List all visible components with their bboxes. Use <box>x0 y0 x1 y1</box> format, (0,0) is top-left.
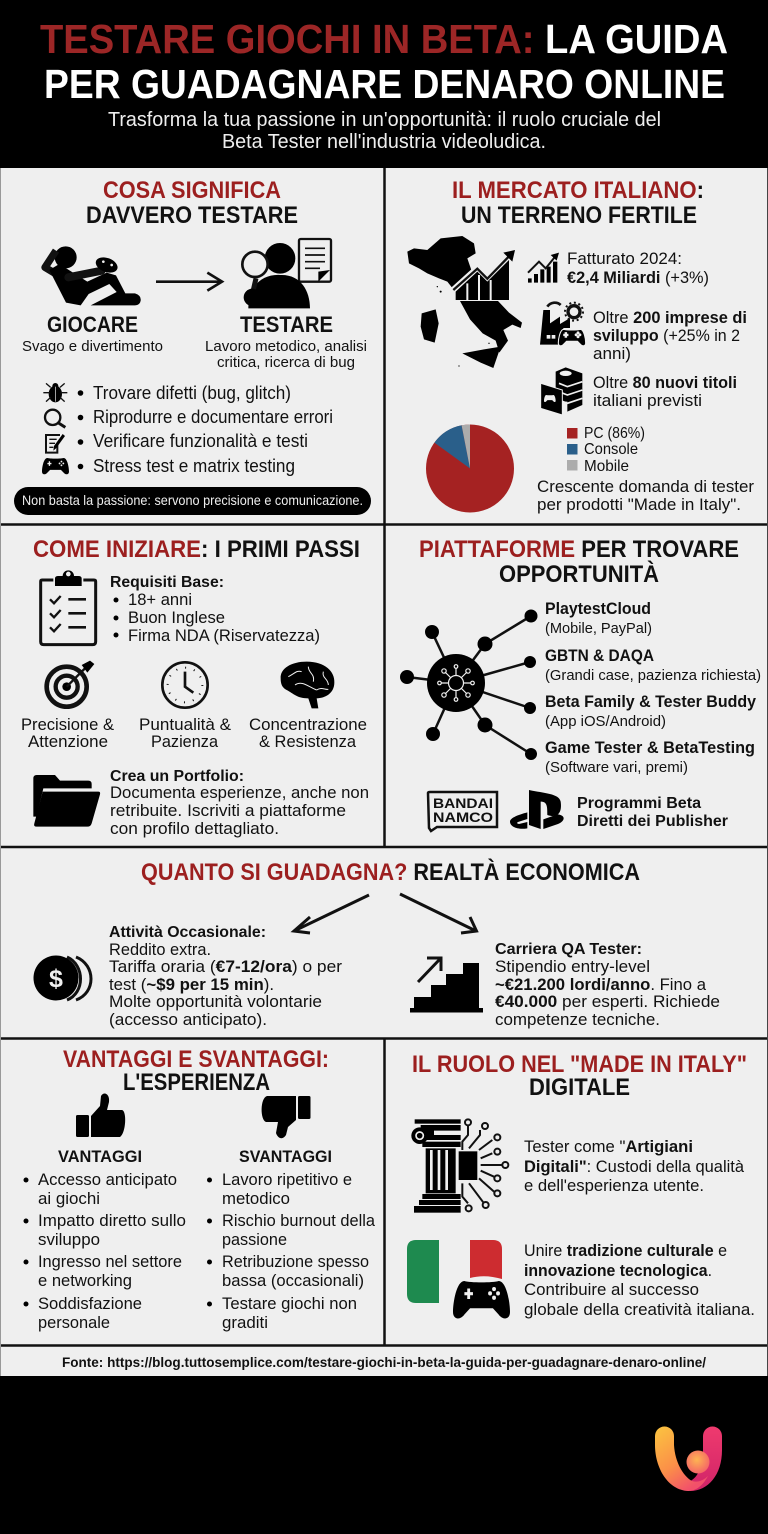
text: attivita occasionale: Tariffa oraria (€7-12/ora) o per <box>109 957 342 976</box>
list: tasks: Riprodurre e documentare errori <box>93 407 333 427</box>
stat: fatturato: Fatturato 2024: <box>567 249 682 268</box>
label: testare <box>205 312 367 371</box>
list: tasks: Trovare difetti (bug, glitch) <box>93 383 291 403</box>
list: tasks: Stress test e matrix testing <box>93 456 295 476</box>
stat: imprese: sviluppo (+25% in 2 <box>593 326 740 345</box>
heading: IL MERCATO ITALIANO: <box>452 177 704 204</box>
text: portfolio: Crea un Portfolio: <box>110 768 244 785</box>
panels background <box>0 168 768 1376</box>
header <box>40 16 728 153</box>
list: vantaggi: Accesso anticipato <box>38 1170 177 1189</box>
subtitle: Beta Tester nell'industria videoludica. <box>222 131 546 153</box>
icon: column with circuit <box>411 1119 508 1213</box>
panel: vantaggi e svantaggi <box>24 1046 376 1332</box>
panel: made in italy <box>407 1051 755 1319</box>
callout: Non basta la passione: servono precisione e comunicazione. <box>22 492 363 508</box>
icon: bug <box>43 383 67 402</box>
title <box>40 16 728 107</box>
heading: VANTAGGI E SVANTAGGI: <box>63 1046 329 1073</box>
arrow: right <box>400 894 476 933</box>
text: carriera qa: Carriera QA Tester: <box>495 941 642 958</box>
heading <box>452 177 704 229</box>
list: tasks: Verificare funzionalità e testi <box>93 431 308 451</box>
legend: PC (86%) <box>584 425 645 442</box>
icon: thumb up <box>76 1094 125 1137</box>
text: domanda: per prodotti "Made in Italy". <box>537 495 741 514</box>
logo: bandai namco: NAMCO <box>433 809 493 825</box>
text: carriera qa: competenze tecniche. <box>495 1010 660 1029</box>
text: requisiti: Buon Inglese <box>128 608 225 627</box>
title: TESTARE GIOCHI IN BETA: LA GUIDA <box>40 16 728 62</box>
icon: target <box>47 661 94 707</box>
label: testare: Lavoro metodico, analisi <box>205 338 367 355</box>
labels: skills <box>21 715 367 751</box>
list: svantaggi: metodico <box>222 1189 290 1208</box>
callout <box>14 487 371 515</box>
list: svantaggi <box>207 1147 376 1332</box>
pie chart <box>426 424 514 512</box>
text: carriera qa: €40.000 per esperti. Richiede <box>495 992 720 1011</box>
list: vantaggi: sviluppo <box>38 1230 100 1249</box>
text: carriera qa <box>495 941 720 1029</box>
text: artigiani digitali: e dell'esperienza utente. <box>524 1176 704 1195</box>
text: programmi beta: Diretti dei Publisher <box>577 813 728 830</box>
icon: games stack <box>541 367 582 415</box>
text: requisiti: 18+ anni <box>128 590 192 609</box>
list: platforms: (App iOS/Android) <box>545 713 666 730</box>
list: platforms: (Mobile, PayPal) <box>545 620 652 637</box>
text: portfolio: con profilo dettagliato. <box>110 819 279 838</box>
label: giocare <box>22 312 163 355</box>
logo: playstation <box>510 790 564 829</box>
text: carriera qa: ~€21.200 lordi/anno. Fino a <box>495 975 707 994</box>
list: svantaggi: Retribuzione spesso <box>222 1252 369 1271</box>
list: platforms: (Grandi case, pazienza richiesta) <box>545 667 761 684</box>
list: svantaggi: Rischio burnout della <box>222 1211 376 1230</box>
text: portfolio: retribuite. Iscriviti a piattaforme <box>110 801 346 820</box>
stat: fatturato <box>567 249 709 287</box>
text: carriera qa: Stipendio entry-level <box>495 957 650 976</box>
list: svantaggi: SVANTAGGI <box>239 1147 332 1166</box>
text: artigiani digitali: Tester come "Artigiani <box>524 1137 693 1156</box>
text: tradizione: Unire tradizione culturale e <box>524 1241 727 1260</box>
text: tradizione: Contribuire al successo <box>524 1280 699 1299</box>
logo: brand u <box>655 1426 722 1491</box>
text: programmi beta: Programmi Beta <box>577 795 701 812</box>
panel: cosa significa <box>14 177 371 515</box>
labels: skills: Pazienza <box>151 732 219 751</box>
list: tasks <box>78 383 333 476</box>
label: giocare: Svago e divertimento <box>22 338 163 355</box>
icon: checklist note <box>46 434 65 453</box>
text: requisiti <box>110 574 320 645</box>
heading: COME INIZIARE: I PRIMI PASSI <box>33 536 360 563</box>
icon: growth chart <box>528 253 559 283</box>
text: artigiani digitali <box>524 1137 745 1195</box>
label: giocare: GIOCARE <box>47 312 138 337</box>
stat: imprese: anni) <box>593 344 631 363</box>
text: requisiti: Requisiti Base: <box>110 574 224 591</box>
labels: skills: Precisione & <box>21 715 115 734</box>
stat: titoli: Oltre 80 nuovi titoli <box>593 373 737 392</box>
icon: network hub <box>400 610 538 760</box>
panel: come iniziare <box>21 536 369 838</box>
text: attivita occasionale: (accesso anticipato). <box>109 1010 267 1029</box>
list: svantaggi: Lavoro ripetitivo e <box>222 1170 352 1189</box>
heading: OPPORTUNITÀ <box>499 560 659 588</box>
list: vantaggi: Soddisfazione <box>38 1294 142 1313</box>
list: platforms: PlaytestCloud <box>545 599 651 618</box>
legend: Mobile <box>584 458 629 475</box>
legend: Console <box>584 441 638 458</box>
text: attivita occasionale: test (~$9 per 15 min). <box>109 975 274 994</box>
icon: clipboard <box>41 570 96 645</box>
heading <box>63 1046 329 1096</box>
list: platforms: Game Tester & BetaTesting <box>545 738 755 757</box>
text: attivita occasionale: Reddito extra. <box>109 940 211 959</box>
icon: coins <box>34 956 91 1000</box>
stat: imprese <box>593 308 747 363</box>
heading: DAVVERO TESTARE <box>86 202 298 229</box>
text: artigiani digitali: Digitali": Custodi della qualità <box>524 1157 745 1176</box>
icon: clock <box>162 662 208 708</box>
panel: quanto si guadagna <box>34 858 720 1029</box>
legend <box>567 425 645 475</box>
list: platforms: Beta Family & Tester Buddy <box>545 692 757 711</box>
text: tradizione: innovazione tecnologica. <box>524 1261 712 1280</box>
text: programmi beta <box>577 795 728 830</box>
heading: COSA SIGNIFICA <box>103 177 281 204</box>
heading <box>86 177 298 229</box>
text: attivita occasionale: Molte opportunità volontarie <box>109 992 322 1011</box>
text: requisiti: Firma NDA (Riservatezza) <box>128 626 320 645</box>
text: tradizione: globale della creatività italiana. <box>524 1300 755 1319</box>
text: domanda <box>537 477 754 514</box>
heading: DIGITALE <box>529 1074 630 1101</box>
label: testare: critica, ricerca di bug <box>217 354 355 371</box>
arrow: giocare to testare <box>156 273 222 291</box>
icon: thumb down <box>262 1096 310 1138</box>
list: vantaggi: e networking <box>38 1271 132 1290</box>
icon: player relaxing <box>45 246 141 305</box>
icon: italy map with chart <box>407 236 522 368</box>
subtitle <box>108 109 661 153</box>
labels: skills: Concentrazione <box>249 715 367 734</box>
text: attivita occasionale: Attività Occasionale: <box>109 924 266 941</box>
text: attivita occasionale <box>109 924 342 1029</box>
panel: piattaforme <box>400 536 761 831</box>
list: platforms: GBTN & DAQA <box>545 646 654 665</box>
list: vantaggi: Ingresso nel settore <box>38 1252 182 1271</box>
heading: L'ESPERIENZA <box>123 1069 270 1096</box>
arrow: left <box>294 895 369 933</box>
icon: magnifier <box>45 410 65 427</box>
icon: career stairs <box>410 958 483 1012</box>
text: portfolio: Documenta esperienze, anche non <box>110 783 369 802</box>
stat: titoli <box>593 373 737 410</box>
heading <box>419 536 739 588</box>
list: platforms: (Software vari, premi) <box>545 759 688 776</box>
list: vantaggi <box>24 1147 186 1332</box>
labels: skills: Attenzione <box>28 732 108 751</box>
icon: italian flag with gamepad <box>407 1240 510 1318</box>
list: vantaggi: personale <box>38 1313 110 1332</box>
panel: mercato italiano <box>407 177 754 514</box>
list: vantaggi: VANTAGGI <box>58 1147 142 1166</box>
logo: bandai namco: BANDAI <box>433 795 493 811</box>
list: svantaggi: passione <box>222 1230 287 1249</box>
icon: tester with magnifier <box>242 239 331 308</box>
stat: titoli: italiani previsti <box>593 391 702 410</box>
stat: fatturato: €2,4 Miliardi (+3%) <box>567 268 709 287</box>
icon: folder <box>33 775 100 827</box>
text: portfolio <box>110 768 369 838</box>
list: svantaggi: Testare giochi non <box>222 1294 357 1313</box>
subtitle: Trasforma la tua passione in un'opportunità: il ruolo cruciale del <box>108 109 661 131</box>
footer source: Fonte: https://blog.tuttosemplice.com/testare-giochi-in-beta-la-guida-per-guadagnare-denaro-online/ <box>62 1354 706 1370</box>
list: svantaggi: bassa (occasionali) <box>222 1271 364 1290</box>
heading <box>412 1051 747 1101</box>
text: tradizione <box>524 1241 755 1319</box>
icon: brain <box>281 662 334 708</box>
heading: UN TERRENO FERTILE <box>461 202 697 229</box>
stat: imprese: Oltre 200 imprese di <box>593 308 747 327</box>
labels: skills: Puntualità & <box>139 715 232 734</box>
heading: QUANTO SI GUADAGNA? REALTÀ ECONOMICA <box>141 858 640 886</box>
icon: factory gear gamepad <box>540 303 586 346</box>
icon: coins: $ <box>49 965 63 993</box>
labels: skills: & Resistenza <box>259 732 357 751</box>
icon: gamepad small <box>42 458 69 474</box>
list: platforms <box>545 599 761 776</box>
list: svantaggi: graditi <box>222 1313 268 1332</box>
logo: bandai namco <box>428 792 497 831</box>
label: testare: TESTARE <box>240 312 333 337</box>
heading: PIATTAFORME PER TROVARE <box>419 536 739 563</box>
list: vantaggi: ai giochi <box>38 1189 100 1208</box>
list: vantaggi: Impatto diretto sullo <box>38 1211 186 1230</box>
text: domanda: Crescente domanda di tester <box>537 477 754 496</box>
